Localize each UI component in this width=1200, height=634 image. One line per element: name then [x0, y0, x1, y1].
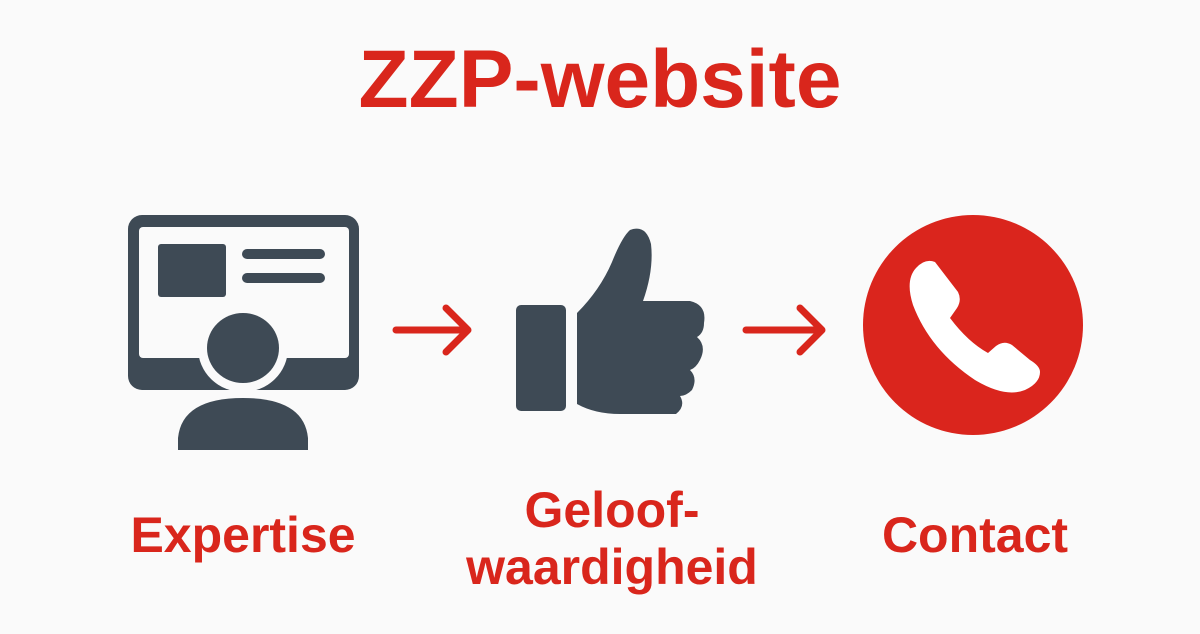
- icon: phone circle: [863, 215, 1083, 435]
- arrow 1: [396, 308, 468, 352]
- title: ZZP-website: [359, 34, 841, 125]
- label: Expertise: Expertise: [130, 507, 356, 563]
- label: Contact: Contact: [882, 507, 1068, 563]
- icon: thumbs up: [516, 229, 704, 414]
- label: Geloofwaardigheid: Geloof-: [524, 482, 699, 538]
- arrow 2: [746, 308, 822, 352]
- label: Geloofwaardigheid: waardigheid: [466, 539, 758, 595]
- icon: monitor with person: [128, 215, 359, 455]
- label: Geloofwaardigheid: [466, 482, 758, 595]
